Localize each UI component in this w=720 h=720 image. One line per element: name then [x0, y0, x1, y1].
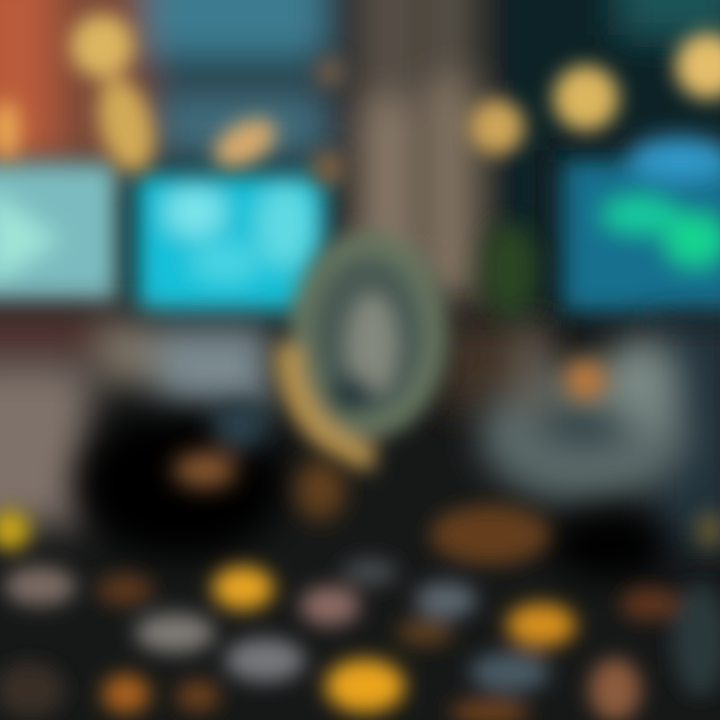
foreground highlights — [173, 399, 345, 520]
upper wall background — [0, 0, 720, 320]
panel: right teal screen — [562, 136, 720, 312]
icon: blurred plant — [482, 222, 538, 318]
panel: left screen — [0, 162, 118, 304]
icon: grey dome — [480, 330, 690, 503]
icon: large ring shape — [288, 243, 436, 458]
lights: warm bokeh — [0, 14, 720, 186]
lower floor background — [0, 312, 720, 550]
panel: middle cyan screen — [136, 174, 326, 312]
bottom cluster: keys and lights — [0, 505, 720, 720]
icon: orange glow — [565, 360, 605, 400]
dark foreground mass — [75, 410, 670, 580]
